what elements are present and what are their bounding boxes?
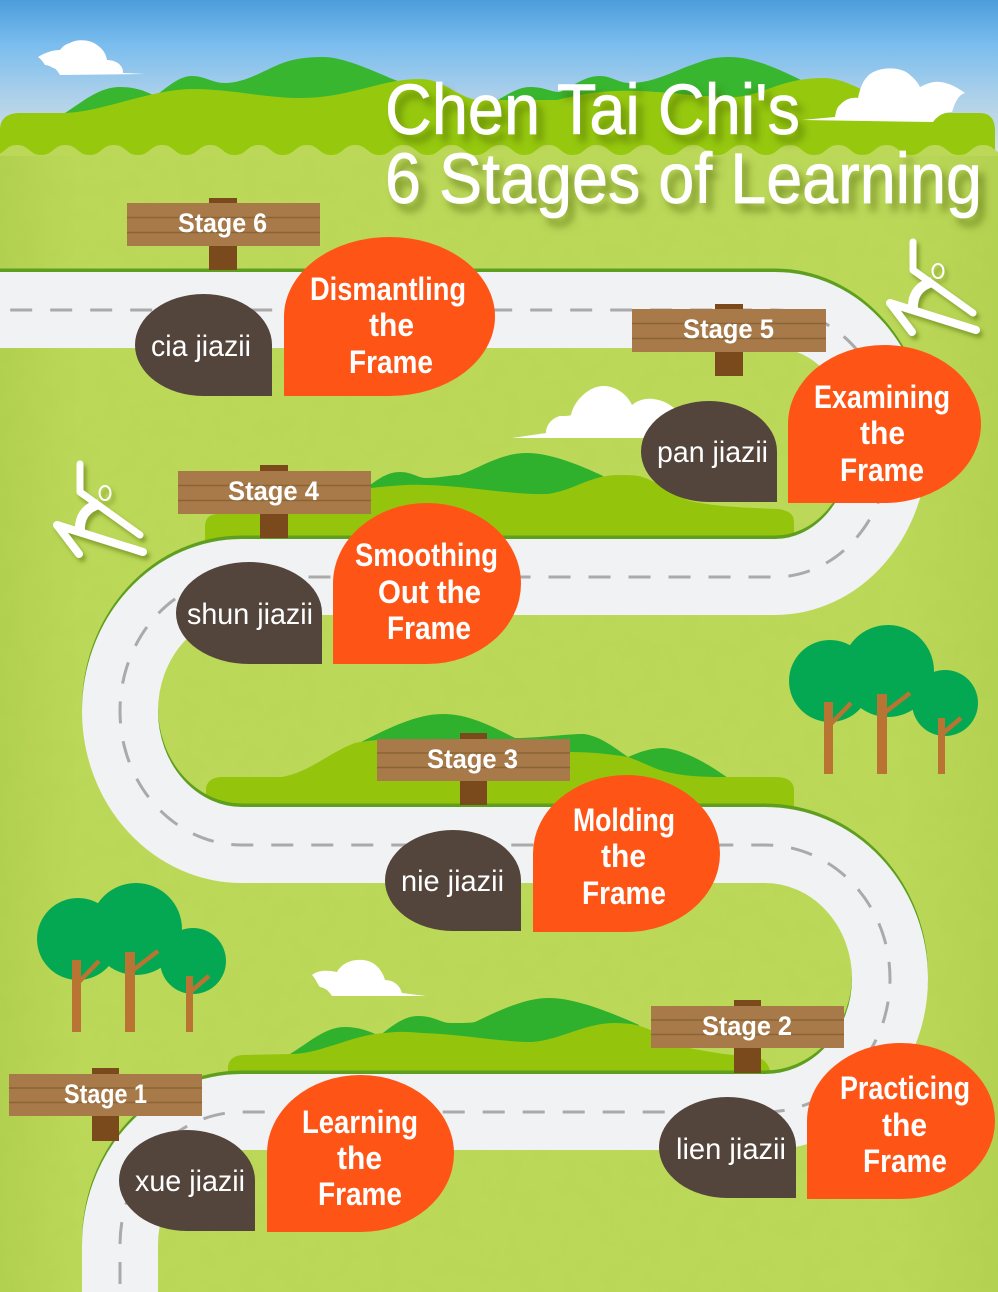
cloud: top right [802,68,965,122]
road centre dashes [0,310,890,1284]
callout: Learning the Frame [267,1075,454,1232]
callout: nie jiazii [385,830,521,931]
callout: Examining the Frame: Frame [840,452,924,488]
callout: Molding the Frame [533,775,720,932]
cloud: lower [312,960,426,996]
sign: stage 5 [632,304,826,376]
winding road [0,306,890,1292]
sign: stage 3 [377,733,570,805]
callout: Examining the Frame: the [860,415,905,451]
callout: xue jiazii [119,1130,255,1231]
callout: Dismantling the Frame: Frame [349,344,433,380]
sign: stage 4 [178,465,371,538]
callout: Smoothing Out the Frame: Out the [378,574,481,610]
sign label: Stage 6 [178,208,267,238]
callout: Examining the Frame [788,345,981,503]
hills behind stage 4 road [205,453,794,540]
icon: tai chi figure, top right [890,242,976,332]
sign label: Stage 4 [228,476,319,506]
callout: nie jiazii: nie jiazii [401,865,504,898]
callout: cia jiazii: cia jiazii [151,330,251,363]
callout: Practicing the Frame: Frame [863,1143,947,1179]
sign: stage 6 [127,198,320,270]
tree group: right [789,625,978,774]
callout: Learning the Frame: the [337,1140,382,1176]
icon: tai chi figure, left [57,464,143,554]
callout: Molding the Frame: the [601,838,646,874]
hills behind stage 3 road [206,714,794,806]
sign label: Stage 3 [427,744,518,774]
callout: pan jiazii [641,401,777,502]
cloud: top left [38,40,145,75]
hills behind stage 2 road [228,998,771,1076]
sky [0,0,998,160]
callout: Molding the Frame: Molding [573,802,675,838]
callout: xue jiazii: xue jiazii [135,1165,245,1198]
callout: Practicing the Frame: Practicing [840,1070,970,1106]
callout: Dismantling the Frame: Dismantling [310,271,466,307]
tree group: left [37,883,226,1032]
sign: stage 1 [9,1068,202,1141]
callout: Dismantling the Frame [284,237,495,396]
callout: shun jiazii [176,562,322,664]
sign: stage 2 [651,1000,844,1073]
callout: Examining the Frame: Examining [814,379,950,415]
callout: lien jiazii: lien jiazii [676,1133,786,1166]
callout: pan jiazii: pan jiazii [657,436,768,469]
title [385,71,982,219]
cloud: middle [512,386,674,438]
callout: shun jiazii: shun jiazii [187,598,313,631]
title: Chen Tai Chi's [385,71,800,150]
callout: Practicing the Frame: the [882,1107,927,1143]
callout: Dismantling the Frame: the [369,307,414,343]
callout: cia jiazii [135,294,272,396]
callout: Molding the Frame: Frame [582,875,666,911]
callout: Smoothing Out the Frame: Frame [387,610,471,646]
callout: Smoothing Out the Frame [333,503,521,664]
callout: Learning the Frame: Learning [302,1104,418,1140]
sign label: Stage 5 [683,314,774,344]
callout: Practicing the Frame [807,1043,995,1199]
sign label: Stage 1 [64,1079,147,1109]
callout: Smoothing Out the Frame: Smoothing [355,537,498,573]
sign label: Stage 2 [702,1011,792,1041]
callout: Learning the Frame: Frame [318,1176,402,1212]
background hills at top [0,57,995,160]
callout: lien jiazii [659,1097,796,1198]
